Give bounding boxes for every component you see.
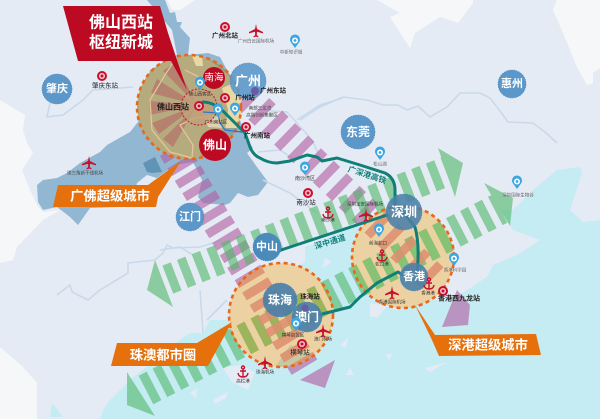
- map markers: 南沙湾区: [295, 175, 315, 182]
- map markers: 深圳宝安国际机场: [347, 200, 383, 208]
- map markers: 香港港: [421, 290, 435, 296]
- map markers: 佛山西客区: [189, 90, 212, 98]
- Shenzhen: 深圳: [391, 204, 417, 220]
- map markers: 南沙站: [296, 198, 316, 206]
- map markers: 香港科学园: [444, 266, 467, 274]
- map markers: 香港国际机场: [378, 298, 406, 306]
- map markers: 珠海机场: [256, 368, 274, 376]
- Zhaoqing: 肇庆: [46, 81, 68, 95]
- Guangshengang label: 广深港高铁: [347, 164, 388, 185]
- Nanhai: [203, 67, 225, 89]
- map markers: 广州站: [235, 92, 255, 102]
- Foshan: 佛山: [203, 137, 227, 152]
- Zhuhai: 珠海: [268, 292, 292, 307]
- callout: Zhuhai Macao: 珠澳都市圈: [130, 346, 196, 362]
- Shenzhen: [386, 194, 422, 230]
- Macao: [292, 302, 322, 332]
- sea: [50, 167, 600, 419]
- callout: Guangfo: [53, 161, 181, 207]
- callout: Shenzhen Hong Kong: 深港超级城市: [448, 336, 528, 352]
- Jiangmen: [176, 203, 204, 231]
- map markers: 南沙港: [321, 216, 335, 224]
- Macao: 澳门: [295, 309, 319, 324]
- title text: 佛山西站: [89, 14, 153, 32]
- Nanhai: 南海: [204, 72, 224, 84]
- rivers: [47, 87, 557, 333]
- map markers: 佛山西站: [157, 102, 189, 112]
- blue rail lines: [203, 112, 245, 132]
- map markers: 松山湖: [373, 160, 387, 168]
- disk sectors: [149, 56, 241, 158]
- panel: Zhuhai Macao circle: [228, 262, 334, 368]
- map markers: 横琴自贸区: [282, 332, 305, 338]
- map markers: 高端创新集聚区: [246, 112, 278, 118]
- callout: Guangfo: 广佛超级城市: [70, 188, 150, 204]
- map markers: 肇庆东站: [92, 80, 118, 90]
- map markers: 澳门机场: [314, 336, 332, 342]
- Zhaoqing: [42, 74, 72, 104]
- Hong Kong: 香港: [403, 269, 425, 283]
- title text: [89, 14, 153, 52]
- map markers: 深圳国际生物谷: [502, 192, 534, 198]
- map markers: 广州东站: [260, 86, 286, 94]
- Zhuhai: [263, 283, 297, 317]
- Jiangmen: 江门: [179, 209, 201, 223]
- Huizhou: [498, 70, 526, 98]
- panel: Foshan circle: [137, 50, 245, 165]
- map markers: 南部三龙湾: [249, 104, 272, 112]
- title callout: [63, 6, 187, 90]
- Dongguan: [341, 115, 375, 149]
- Foshan: [199, 129, 231, 161]
- dark water patch: [143, 157, 162, 173]
- high speed rail lines: [203, 102, 418, 315]
- purple corridor north east: [246, 96, 470, 327]
- city circles: [42, 63, 526, 332]
- map markers: 蛇口港: [375, 260, 389, 268]
- purple corridor south: [173, 148, 335, 388]
- map markers: 广州南站: [244, 130, 270, 140]
- Zhongshan: 中山: [256, 239, 278, 253]
- green corridor upper: [147, 148, 463, 307]
- map markers: 广州白云国际机场: [238, 38, 274, 44]
- map markers: 横琴站: [290, 348, 310, 356]
- delta water: [37, 0, 268, 225]
- map markers: 中新知识城: [280, 48, 303, 56]
- Huizhou: 惠州: [501, 76, 523, 90]
- Guangzhou: [230, 63, 266, 99]
- map markers: 香港西九龙站: [438, 294, 480, 302]
- Zhongshan: [253, 233, 281, 261]
- map markers: 珠三角新干线机场: [67, 170, 103, 176]
- map markers: 珠海站: [300, 292, 320, 300]
- Shenzhong label: 深中通道: [313, 232, 347, 251]
- Hong Kong: [400, 263, 428, 291]
- map markers: 前海蛇口: [369, 240, 387, 246]
- map markers: 广州南站区: [205, 118, 228, 126]
- map markers: [67, 22, 534, 384]
- title text: 枢纽新城: [89, 32, 153, 52]
- green corridor lower: [127, 183, 513, 416]
- map markers: 广州北站: [212, 30, 238, 40]
- Dongguan: 东莞: [346, 124, 370, 139]
- callout: Zhuhai Macao: [111, 322, 232, 366]
- map markers: 高栏港: [236, 378, 250, 384]
- callout: Shenzhen Hong Kong: [415, 305, 541, 356]
- islands: [190, 258, 447, 404]
- panel: Shenzhen Hong Kong circle: [350, 204, 456, 310]
- Guangzhou: 广州: [235, 74, 261, 88]
